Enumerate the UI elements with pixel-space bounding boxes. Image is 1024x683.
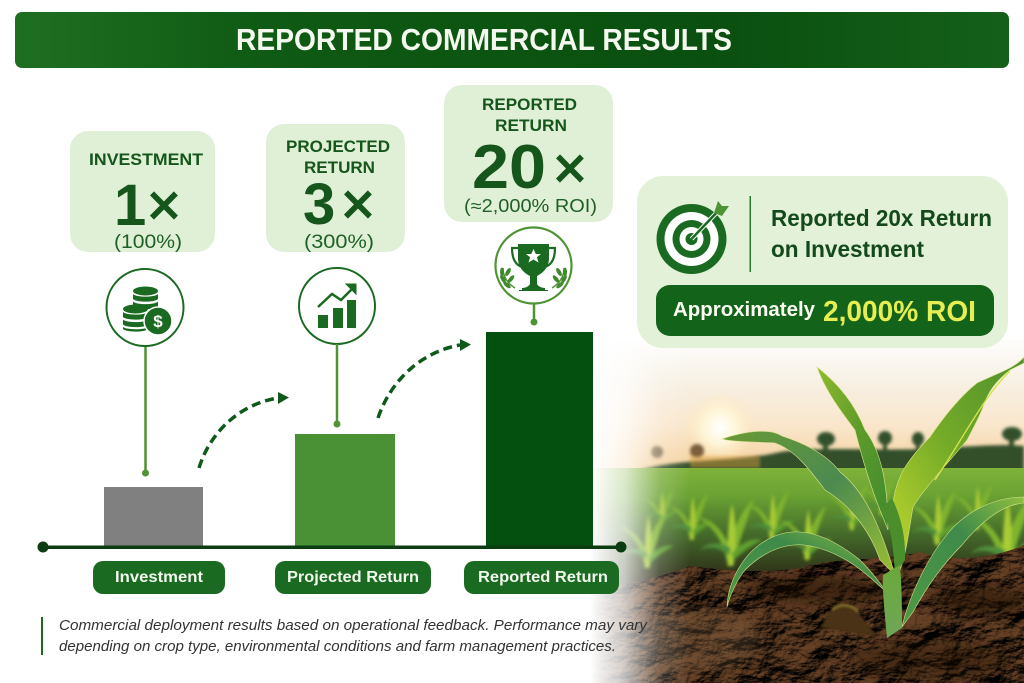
footnote: Commercial deployment results based on operational feedback. Performance may vary [59,618,648,634]
card: reported return: 20 [472,133,546,202]
card: projected return: (300%) [304,232,374,253]
label: reported return [464,561,619,594]
label: reported return: Reported Return [478,569,608,586]
card: investment: INVESTMENT [89,150,204,169]
card: projected return: 3 [303,172,335,237]
card: investment: × [147,173,181,238]
callout heading: Reported 20x Return [771,205,992,231]
footnote [41,617,648,655]
axis [38,542,626,552]
icon: growth chart [299,268,375,344]
stem: investment [142,347,149,476]
photo: corn seedling in field at sunrise [580,340,1024,683]
title: REPORTED COMMERCIAL RESULTS [236,22,732,57]
icon: target with arrow [656,201,729,274]
footnote: depending on crop type, environmental conditions and farm management practices. [59,639,616,655]
arrow: projected to reported [378,339,471,418]
card: projected return: RETURN [304,158,375,177]
card: investment [70,131,215,253]
card: reported return: REPORTED [482,95,577,114]
card: projected return: × [341,172,375,237]
label: projected return [275,561,431,594]
card: projected return [266,124,405,253]
callout heading [771,205,992,262]
ROI pill: 2,000% ROI [823,296,976,328]
ROI pill: Approximately [673,299,816,321]
icon: coins with dollar: $ [153,312,163,331]
icon: trophy with laurels [496,228,572,304]
card: reported return [444,85,613,222]
bar: reported return [486,332,593,547]
foreground seedling plant [722,357,1024,638]
card: investment: (100%) [114,232,182,253]
callout heading: on Investment [771,236,924,262]
label: investment [93,561,225,594]
card: projected return: PROJECTED [286,137,390,156]
arrow: investment to projected [199,392,289,468]
ROI pill [656,285,994,336]
icon: coins with dollar [106,269,184,346]
bar: projected return [295,434,395,547]
card: reported return: × [553,136,587,201]
stem: projected [334,344,340,428]
label: investment: Investment [115,569,204,586]
stem: reported [530,304,538,326]
card: reported return: RETURN [495,116,567,135]
panel: 20x return callout [637,176,1008,348]
title banner [15,12,1009,68]
bar: investment [104,487,203,547]
label: projected return: Projected Return [287,569,419,586]
card: investment: 1 [114,173,146,238]
card: reported return: (≈2,000% ROI) [464,196,597,216]
